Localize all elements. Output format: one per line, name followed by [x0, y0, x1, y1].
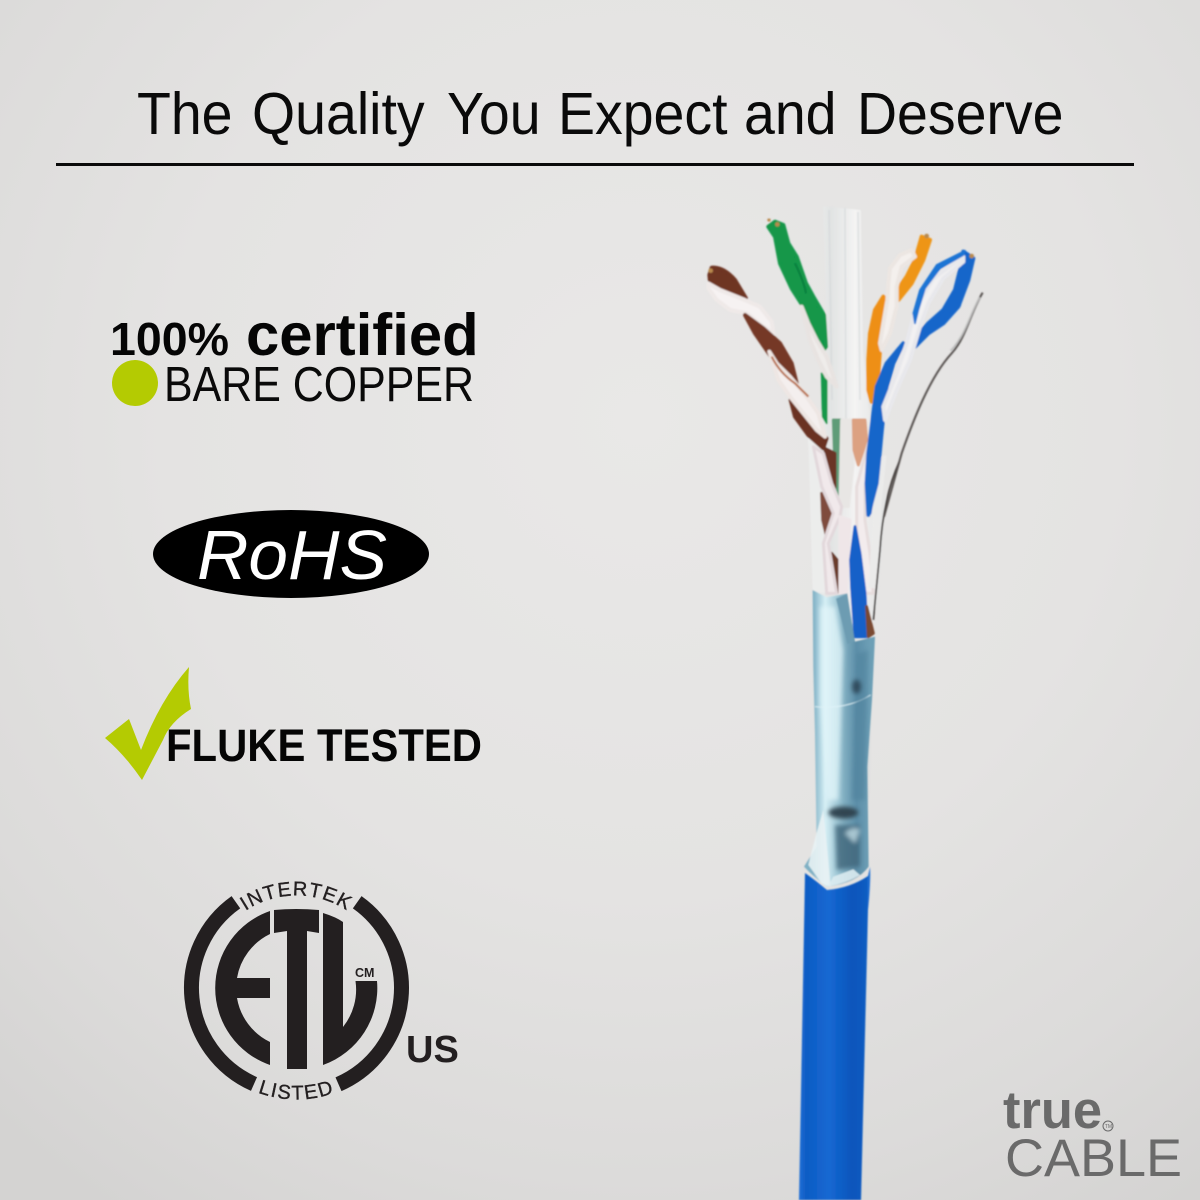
- photo: cable with twisted pairs: [708, 206, 983, 1200]
- text: Intertek: INTERTEK: [240, 881, 353, 910]
- badge: 100% certified bare copper: [110, 301, 479, 412]
- outer ring: [191, 902, 401, 1084]
- badge: Fluke tested: [105, 667, 482, 780]
- icon: green dot: [112, 360, 158, 406]
- blue outer jacket: [799, 867, 870, 1200]
- title: The: [137, 81, 233, 147]
- green pair: [768, 222, 837, 423]
- orange pair: [868, 237, 930, 402]
- text: 100% certified: 100%: [110, 313, 229, 365]
- trademark mark: TM: [1105, 1124, 1112, 1130]
- title underline: [56, 163, 1134, 166]
- text: Listed: LISTED: [259, 1080, 332, 1100]
- icon: green check mark: [105, 667, 191, 780]
- title: Expect: [558, 81, 728, 147]
- clear film: [808, 206, 886, 640]
- logo word: CABLE: CABLE: [1005, 1129, 1182, 1188]
- logo: Intertek ETL listed: [184, 881, 459, 1100]
- title: and: [744, 81, 837, 147]
- logo word: true: true: [1003, 1081, 1102, 1140]
- text: bare copper: BARE COPPER: [164, 358, 474, 412]
- text: CM: CM: [355, 966, 374, 980]
- letter E: [215, 911, 270, 1065]
- title: You: [447, 81, 541, 147]
- brown pair: [708, 268, 827, 448]
- text: 100% certified: certified: [246, 301, 479, 368]
- RoHS oval: [153, 510, 429, 598]
- logo: trueCABLE: [1003, 1081, 1182, 1188]
- copper wire tips: [708, 218, 974, 273]
- blue pair: [867, 251, 973, 515]
- text: fluke tested: FLUKE TESTED: [166, 720, 482, 771]
- twisted pairs upper section: [708, 218, 983, 517]
- letter T: [274, 909, 319, 1069]
- title: Deserve: [857, 81, 1063, 147]
- letter L: [323, 913, 377, 1065]
- twisted pairs lower section: [808, 420, 899, 637]
- drain wire: [884, 293, 983, 517]
- badge: RoHS: [153, 510, 429, 598]
- title: Quality: [252, 81, 425, 147]
- text: US: US: [406, 1029, 459, 1071]
- RoHS text: RoHS: [197, 516, 387, 594]
- trademark mark: [1103, 1121, 1113, 1131]
- foil shield: [804, 590, 875, 887]
